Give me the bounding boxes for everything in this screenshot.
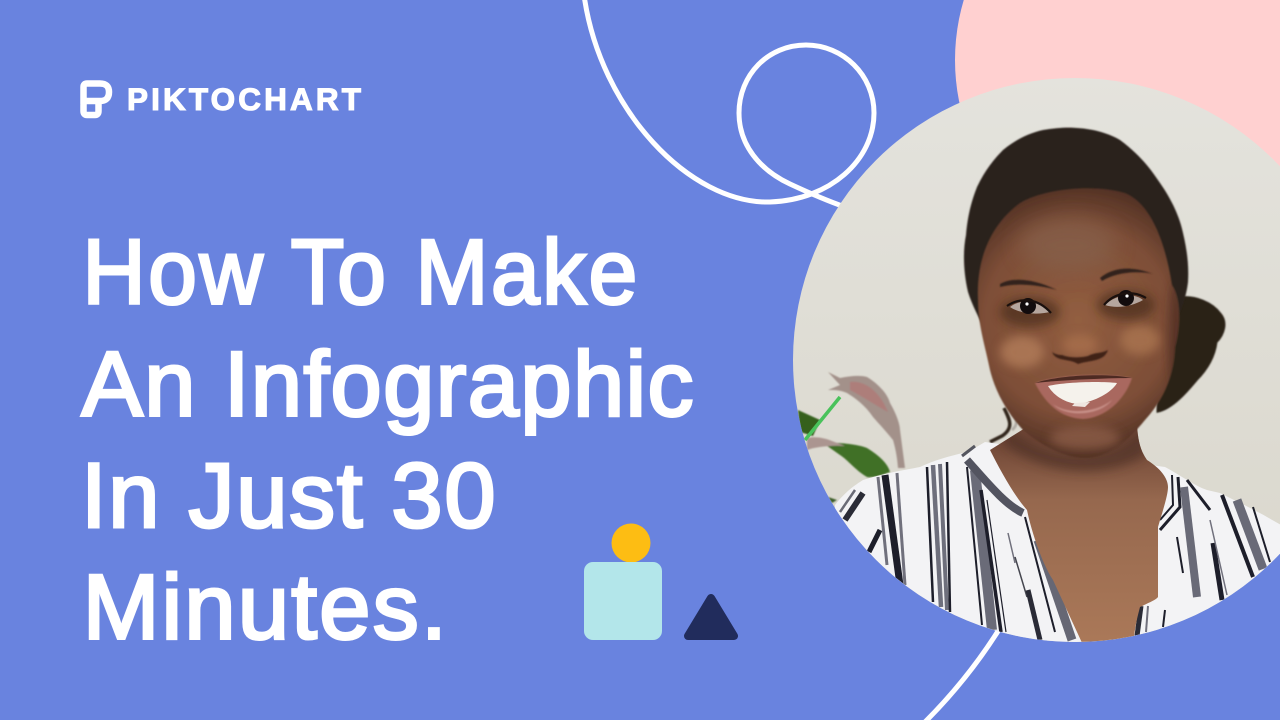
icon: Piktochart mark: [84, 84, 109, 115]
title: In Just 30: [81, 445, 496, 547]
icon: navy triangle: [688, 598, 734, 636]
icon: light blue square: [584, 562, 662, 640]
stray hair and curl at neck: [990, 408, 1010, 442]
wordmark: PIKTOCHART: [127, 81, 361, 117]
title: [81, 221, 694, 658]
nose: [1052, 334, 1108, 364]
shirt stripes: [840, 446, 1270, 640]
face: [978, 188, 1183, 458]
photo background wall: [790, 75, 1280, 645]
title: An Infographic: [82, 334, 694, 436]
title: How To Make: [82, 221, 637, 324]
forehead shading: [1026, 219, 1109, 266]
right edge shadow: [1164, 284, 1179, 378]
plant: [798, 372, 905, 503]
decorative pink circle: [955, 0, 1280, 270]
neck and chest skin: [990, 425, 1168, 645]
cheek highlights: [1000, 336, 1044, 368]
eyebrows: [1000, 280, 1057, 290]
logo: Piktochart: [84, 81, 361, 117]
mouth: [1035, 375, 1132, 419]
hair bun: [1158, 298, 1224, 411]
chin shadow on neck: [1005, 425, 1145, 471]
chin tone: [1050, 426, 1120, 450]
icon: yellow circle: [612, 524, 650, 562]
shirt base: [835, 442, 1280, 650]
lower white line: [925, 628, 1000, 720]
photo: smiling woman in circle: [790, 75, 1280, 650]
eye socket shadows: [1000, 297, 1060, 327]
right eye: [1104, 290, 1146, 307]
hair: [964, 128, 1188, 330]
plant stem: [805, 397, 840, 440]
decorative shapes: [584, 524, 734, 640]
looping white line: [584, 0, 874, 207]
left eye: [1007, 298, 1051, 314]
title: Minutes.: [83, 556, 447, 658]
